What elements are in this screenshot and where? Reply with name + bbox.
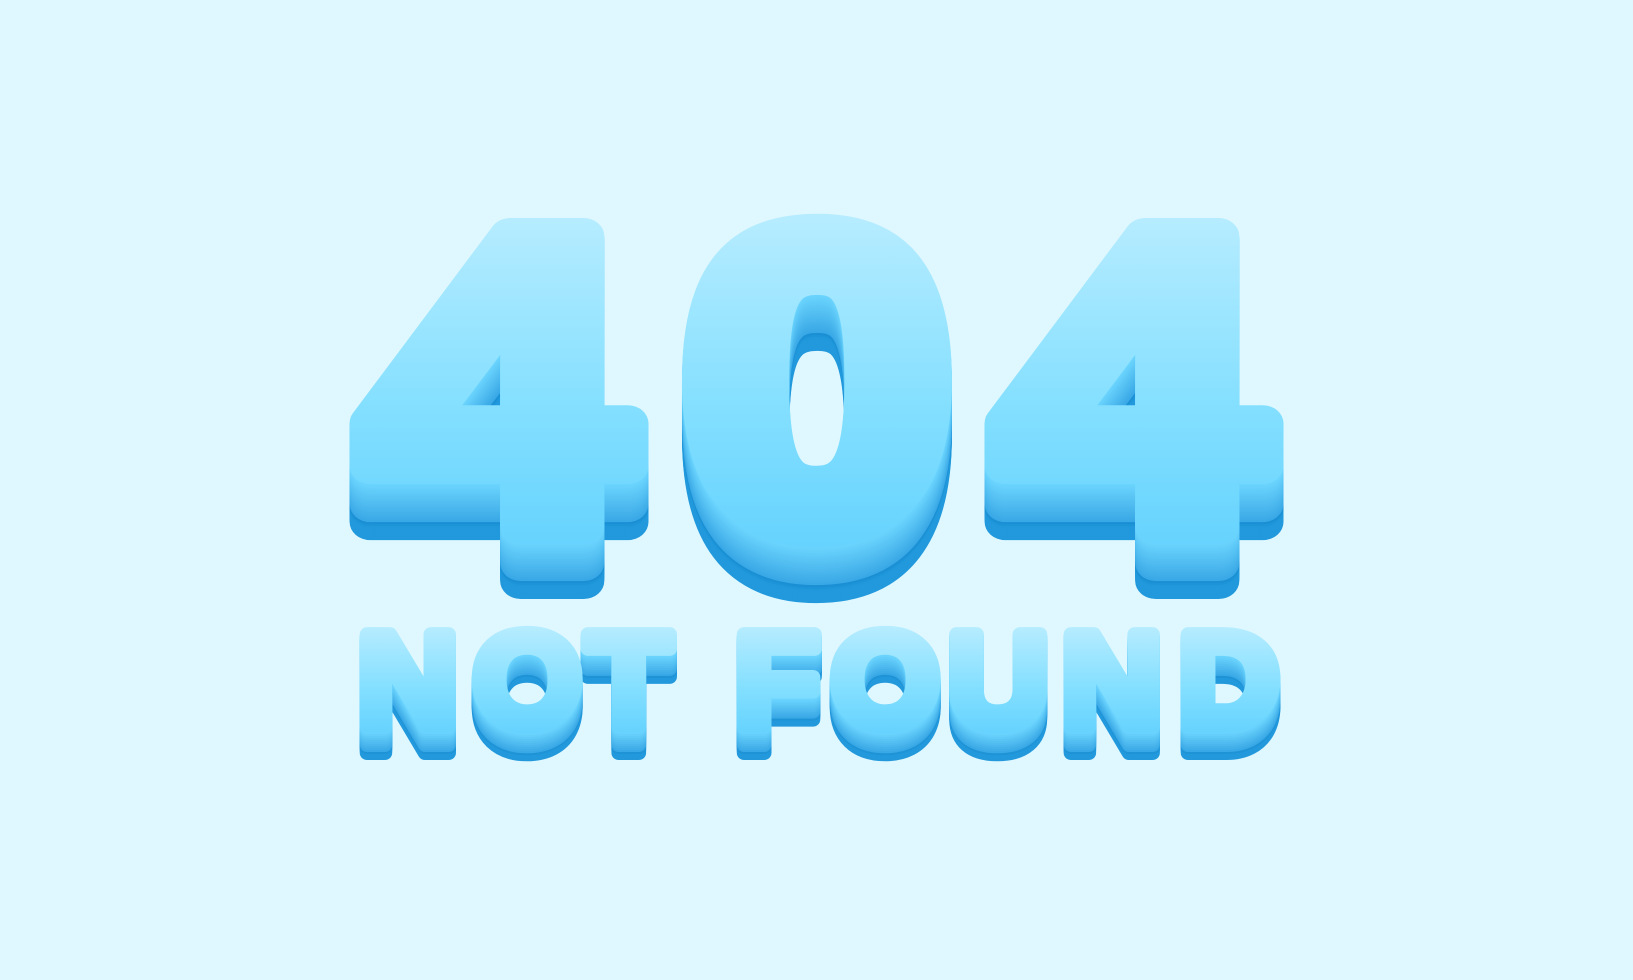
404 extrusion: 404 [363, 180, 1268, 649]
404 extrusion: 404 [363, 168, 1268, 637]
NOT FOUND front face: NOT FOUND [358, 606, 1279, 753]
404 extrusion: 404 [363, 192, 1268, 661]
NOT FOUND extrusion: NOT FOUND [358, 616, 1279, 763]
NOT FOUND extrusion: NOT FOUND [358, 630, 1279, 777]
heading: 404 [363, 146, 1268, 671]
NOT FOUND extrusion: NOT FOUND [358, 608, 1279, 755]
404 extrusion: 404 [363, 170, 1268, 639]
404 extrusion: 404 [363, 200, 1268, 669]
NOT FOUND extrusion: NOT FOUND [358, 634, 1279, 781]
404 extrusion: 404 [363, 154, 1268, 623]
subheading: NOT FOUND [358, 606, 1279, 781]
404 extrusion: 404 [363, 178, 1268, 647]
404 extrusion: 404 [363, 202, 1268, 671]
NOT FOUND extrusion: NOT FOUND [358, 622, 1279, 769]
404 extrusion: 404 [363, 156, 1268, 625]
NOT FOUND extrusion: NOT FOUND [358, 626, 1279, 773]
NOT FOUND extrusion: NOT FOUND [358, 612, 1279, 759]
404 front face: 404 [363, 146, 1268, 615]
NOT FOUND extrusion: NOT FOUND [358, 628, 1279, 775]
404 extrusion: 404 [363, 150, 1268, 619]
404 extrusion: 404 [363, 188, 1268, 657]
404 extrusion: 404 [363, 198, 1268, 667]
404 extrusion: 404 [363, 186, 1268, 655]
404 extrusion: 404 [363, 158, 1268, 627]
404 extrusion: 404 [363, 160, 1268, 629]
404 extrusion: 404 [363, 176, 1268, 645]
404 extrusion: 404 [363, 148, 1268, 617]
404 extrusion: 404 [363, 166, 1268, 635]
404 extrusion: 404 [363, 174, 1268, 643]
404 extrusion: 404 [363, 184, 1268, 653]
404 extrusion: 404 [363, 190, 1268, 659]
NOT FOUND extrusion: NOT FOUND [358, 632, 1279, 779]
404 extrusion: 404 [363, 182, 1268, 651]
404 extrusion: 404 [363, 152, 1268, 621]
NOT FOUND extrusion: NOT FOUND [358, 618, 1279, 765]
NOT FOUND extrusion: NOT FOUND [358, 620, 1279, 767]
404 extrusion: 404 [363, 164, 1268, 633]
NOT FOUND extrusion: NOT FOUND [358, 614, 1279, 761]
404 extrusion: 404 [363, 196, 1268, 665]
NOT FOUND extrusion: NOT FOUND [358, 624, 1279, 771]
404 extrusion: 404 [363, 162, 1268, 631]
404 extrusion: 404 [363, 172, 1268, 641]
NOT FOUND extrusion: NOT FOUND [358, 610, 1279, 757]
404 extrusion: 404 [363, 194, 1268, 663]
